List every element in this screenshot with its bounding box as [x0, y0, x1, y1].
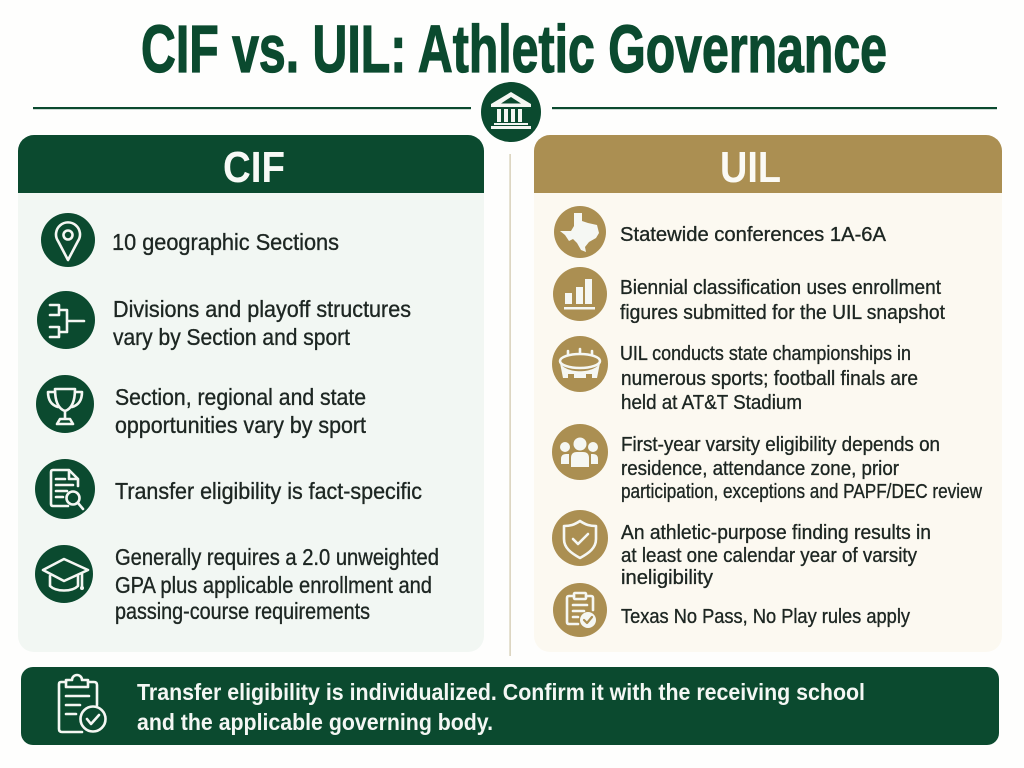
text: GPA requirement: [115, 544, 439, 624]
text: GPA requirement: GPA plus applicable enrollment and: [115, 572, 432, 598]
text: opportunities: Section, regional and state: [115, 384, 366, 410]
text: first-year eligibility: First-year varsity eligibility depends on: [621, 433, 940, 456]
text: sections: 10 geographic Sections: [112, 229, 339, 255]
text: divisions: vary by Section and sport: [113, 324, 351, 350]
icon: institution building: [481, 82, 541, 142]
icon: playoff bracket: [37, 291, 95, 349]
text: footer note: and the applicable governing body.: [137, 709, 493, 735]
icon: group of people: [552, 424, 608, 480]
text: championships: held at AT&T Stadium: [621, 391, 802, 414]
panel: CIF: [18, 135, 484, 652]
icon: clipboard with check: [553, 583, 607, 637]
text: GPA requirement: passing-course requirements: [115, 598, 370, 624]
UIL header: [534, 135, 1002, 193]
icon: bar chart: [553, 267, 607, 321]
icon: document with magnifier: [35, 459, 95, 519]
panel: UIL: [534, 135, 1002, 652]
icon: stadium: [552, 336, 608, 392]
text: championships: UIL conducts state championships in: [620, 342, 911, 365]
icon: Texas map: [554, 206, 606, 258]
text: championships: [620, 342, 918, 414]
text: classification: [620, 276, 945, 324]
text: athletic-purpose: ineligibility: [621, 566, 714, 589]
CIF header: [18, 135, 484, 193]
icon: graduation cap: [35, 545, 93, 603]
text: divisions: [113, 296, 411, 350]
CIF header: CIF: [223, 143, 285, 192]
text: opportunities: opportunities vary by sport: [115, 412, 367, 438]
text: divisions: Divisions and playoff structures: [113, 296, 411, 322]
text: first-year eligibility: [621, 433, 982, 503]
text: athletic-purpose: at least one calendar year of varsity: [621, 544, 918, 567]
text: classification: figures submitted for the UIL snapshot: [620, 301, 945, 324]
text: classification: Biennial classification uses enrollment: [620, 276, 941, 299]
callout: footer note: [21, 667, 999, 745]
text: footer note: [137, 679, 865, 735]
text: no pass no play: Texas No Pass, No Play rules apply: [621, 605, 911, 628]
text: athletic-purpose: [621, 521, 931, 589]
UIL header: UIL: [720, 143, 781, 192]
icon: trophy: [36, 375, 94, 433]
text: championships: numerous sports; football finals are: [621, 367, 918, 390]
text: footer note: Transfer eligibility is individualized. Confirm it with the receiving school: [137, 679, 865, 705]
text: first-year eligibility: residence, attendance zone, prior: [621, 457, 899, 480]
text: transfer: Transfer eligibility is fact-specific: [115, 478, 422, 504]
text: opportunities: [115, 384, 367, 438]
text: GPA requirement: Generally requires a 2.0 unweighted: [115, 544, 439, 570]
icon: shield with check: [552, 510, 608, 566]
icon: clipboard with check: [59, 675, 106, 732]
text: statewide: Statewide conferences 1A-6A: [620, 223, 886, 246]
icon: map pin: [41, 213, 95, 267]
text: athletic-purpose: An athletic-purpose finding results in: [621, 521, 931, 544]
